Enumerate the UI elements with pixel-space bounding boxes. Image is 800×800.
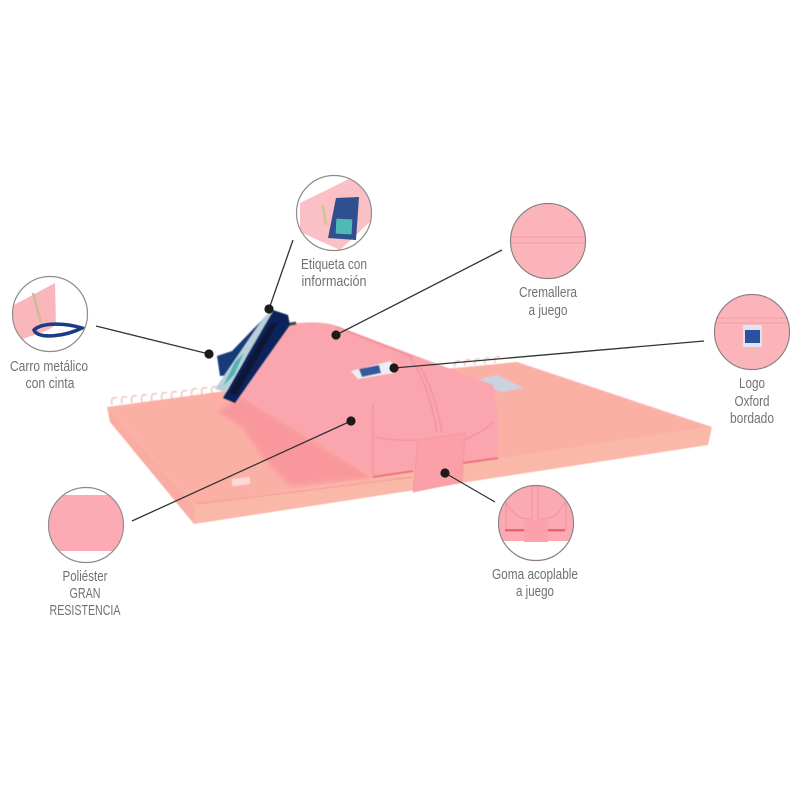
tag teal panel [223, 353, 244, 386]
label: Etiqueta con [301, 256, 367, 273]
callout: goma: a juego [516, 583, 554, 600]
callout: poliester [48, 416, 356, 619]
callout: logo: Oxford [734, 393, 770, 410]
zipper pull tag and cord [215, 310, 296, 403]
inset photo: metal pull with cord [12, 283, 82, 340]
notebook front edge [194, 427, 712, 524]
inset photo: logo [715, 295, 789, 369]
inset photo: pouch and tag [300, 176, 372, 250]
notebook label [477, 375, 523, 392]
elastic strap [413, 433, 465, 492]
callout: cremallera [331, 204, 586, 340]
notebook front lip [196, 477, 413, 504]
notebook [107, 357, 712, 524]
label: Logo [739, 375, 765, 392]
pencil case body [240, 322, 498, 475]
callout: logo: bordado [730, 410, 774, 427]
pencil case strip beneath [373, 458, 498, 477]
label: Goma acoplable [492, 566, 578, 583]
leader line [394, 341, 704, 368]
inset photo: zipper [511, 204, 585, 278]
leader line [269, 240, 293, 309]
notebook cover [107, 362, 712, 505]
leader line [132, 421, 351, 521]
pencil case [240, 322, 498, 492]
zipper ring [285, 323, 296, 325]
notebook logo [232, 477, 250, 486]
leader line [336, 250, 502, 335]
inset photo: fabric [48, 495, 124, 551]
notebook glossy reflection [218, 395, 373, 486]
leader line [96, 326, 209, 354]
notebook left edge [107, 407, 194, 524]
navy cord [217, 320, 268, 376]
dark tag [223, 310, 290, 403]
pencil case seams [337, 327, 493, 475]
callout: logo [389, 294, 790, 427]
label: Poliéster [62, 568, 108, 585]
tag light strip [215, 311, 273, 392]
callout: goma [440, 468, 578, 600]
callout: cremallera: a juego [528, 302, 568, 319]
callout: etiqueta: información [302, 273, 366, 290]
callout: poliester: RESISTENCIA [50, 602, 120, 619]
tag inner black [229, 322, 278, 395]
callout: etiqueta [264, 176, 372, 314]
label: Cremallera [519, 284, 578, 301]
callout: poliester: GRAN [70, 585, 100, 602]
notebook spiral binding [112, 357, 500, 405]
callout: carro metalico: con cinta [26, 375, 75, 392]
label: Carro metálico [10, 358, 88, 375]
callout: carro metalico [10, 276, 214, 392]
inset photo: elastic strap [498, 486, 574, 542]
embroidered logo tab [351, 361, 394, 379]
leader line [445, 473, 495, 502]
